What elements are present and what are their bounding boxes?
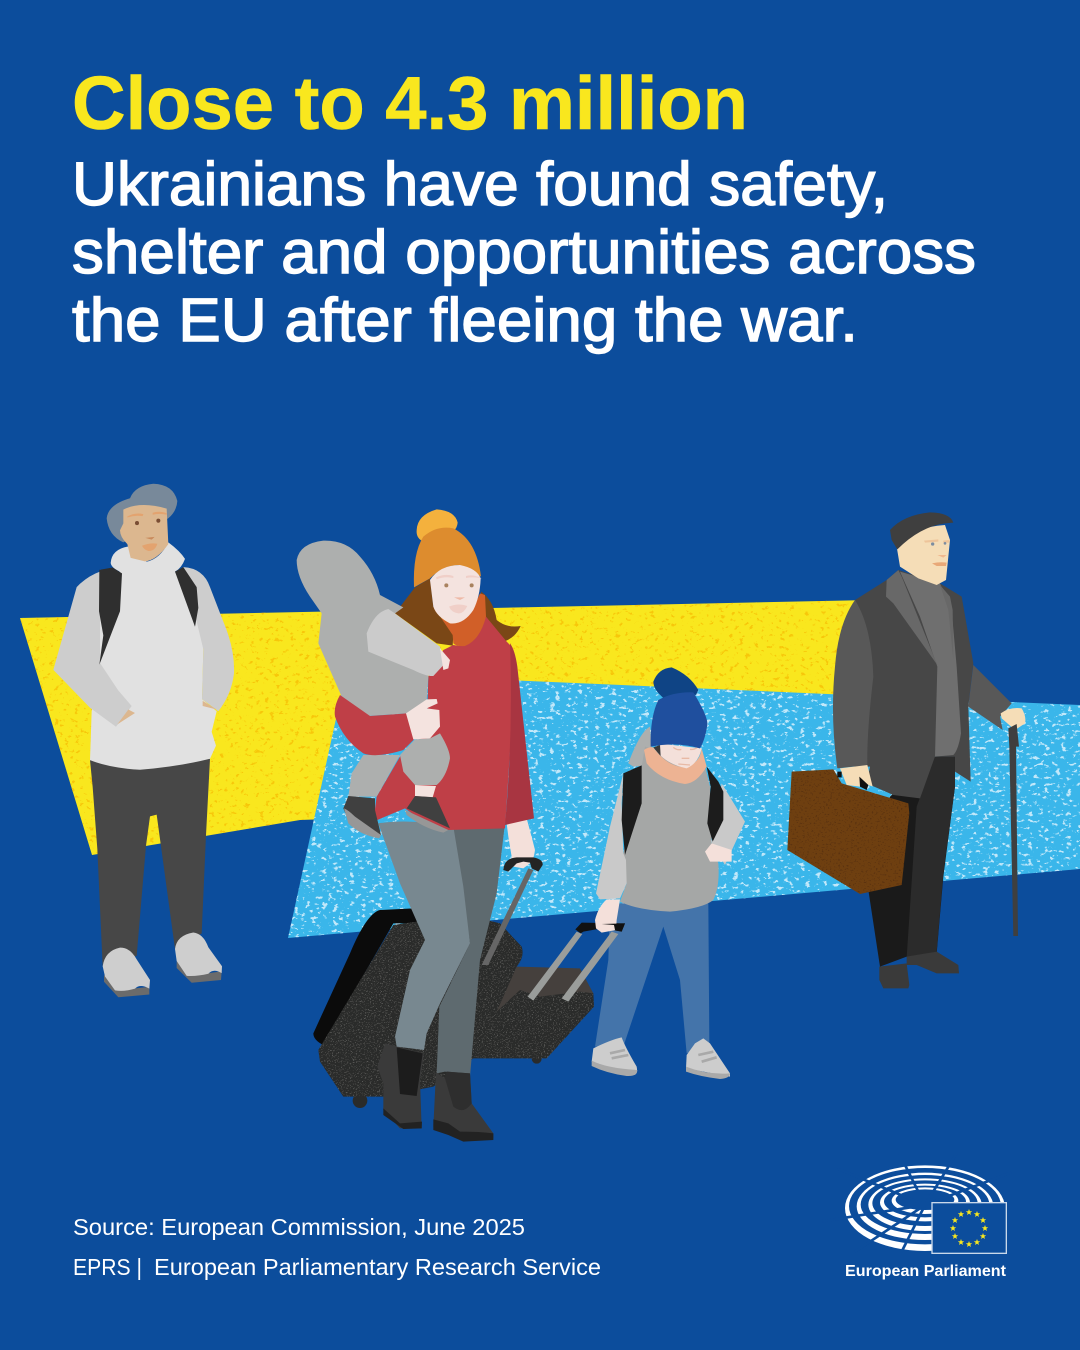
facial features [127, 512, 167, 551]
mother's arm [335, 695, 415, 755]
heading: supporting statement [72, 150, 976, 354]
bobble [417, 509, 458, 541]
child's hand on handle [595, 899, 620, 933]
source text: European Parliamentary Research Service [154, 1254, 601, 1280]
hoodie [90, 542, 217, 770]
cane [1008, 724, 1019, 936]
hat [651, 692, 707, 748]
mother and toddler upper body [297, 509, 534, 838]
light leg [378, 821, 470, 1050]
face [120, 505, 168, 561]
toddler's arm [367, 609, 445, 676]
heading: supporting statement: shelter and opportunities across [72, 218, 976, 286]
figure: mother carrying toddler [297, 509, 534, 1142]
trousers [90, 759, 210, 966]
mother's hand [406, 699, 440, 739]
left trainer [592, 1037, 637, 1076]
second suitcase top [490, 967, 593, 1020]
jacket [838, 570, 973, 798]
logo: European Parliament [822, 1149, 1011, 1280]
cap [890, 512, 953, 549]
toddler's body [297, 541, 428, 716]
scarf [644, 747, 707, 784]
logo wordmark: European Parliament [845, 1263, 1006, 1280]
left sleeve [53, 572, 132, 727]
suitcase back panel [313, 908, 420, 1045]
flag band: yellow [20, 600, 870, 855]
child's upper body [596, 667, 745, 912]
jeans [595, 903, 709, 1053]
facial features [436, 575, 482, 613]
suitcase textured body [318, 920, 594, 1097]
bobble [653, 667, 698, 699]
heading: supporting statement: Ukrainians have found safety, [72, 150, 888, 218]
face [653, 743, 702, 768]
sweater [620, 747, 719, 912]
toddler's legs [348, 733, 450, 797]
hood [628, 727, 652, 767]
hemicycle emblem [822, 1149, 1011, 1261]
dark leg [437, 823, 505, 1077]
right shoe [175, 932, 222, 983]
hand on cane [1001, 708, 1025, 730]
right sleeve [712, 783, 745, 865]
scarf [433, 593, 486, 646]
EU flag [932, 1203, 1006, 1253]
left sleeve [833, 600, 873, 768]
jumper [900, 572, 961, 757]
first trolley handle [482, 857, 543, 965]
second trolley handle [528, 923, 625, 1002]
suitcase [787, 769, 909, 894]
backpack straps [622, 765, 723, 855]
front boot [433, 1072, 493, 1142]
source text: Source: European Commission, June 2025 [73, 1214, 525, 1240]
facial features [924, 539, 949, 566]
backpack straps [99, 567, 198, 665]
figure: elderly man with cane and case [787, 512, 1025, 988]
handle grip over hand [602, 923, 625, 932]
right trainer [686, 1038, 730, 1079]
source text [73, 1214, 601, 1280]
right sleeve [968, 665, 1012, 730]
hair [395, 578, 521, 646]
case handle [837, 772, 868, 790]
hair [107, 484, 177, 542]
source text: EPRS | [73, 1254, 142, 1280]
wheels [353, 1054, 542, 1108]
toddler's hand [440, 648, 450, 670]
luggage: mother's suitcases [313, 818, 594, 1108]
child's legs and shoes [528, 899, 730, 1079]
sweater shaded sleeve [505, 643, 534, 825]
shoes [879, 952, 959, 988]
left shoe [103, 948, 150, 997]
toddler's shoes [343, 796, 450, 838]
lapels [886, 570, 953, 665]
hand on case [840, 765, 873, 787]
toddler's ankle [415, 785, 436, 797]
hat [414, 528, 481, 587]
hand [705, 843, 732, 862]
hands [117, 701, 217, 724]
figure: man with backpack [53, 484, 234, 997]
mother's legs and boots [377, 821, 505, 1142]
sweater torso [373, 617, 513, 830]
mother's hand on handle [507, 818, 535, 868]
left sleeve [596, 773, 627, 899]
right sleeve [183, 567, 234, 711]
figure: child with backpack [528, 667, 745, 1079]
face [430, 565, 481, 623]
rear boot [377, 1043, 424, 1129]
title: headline figure: Close to 4.3 million [72, 61, 748, 145]
head [897, 525, 950, 585]
heading: supporting statement: the EU after fleeing the war. [72, 286, 858, 354]
trousers [868, 757, 955, 967]
flag band: blue [288, 673, 1080, 938]
